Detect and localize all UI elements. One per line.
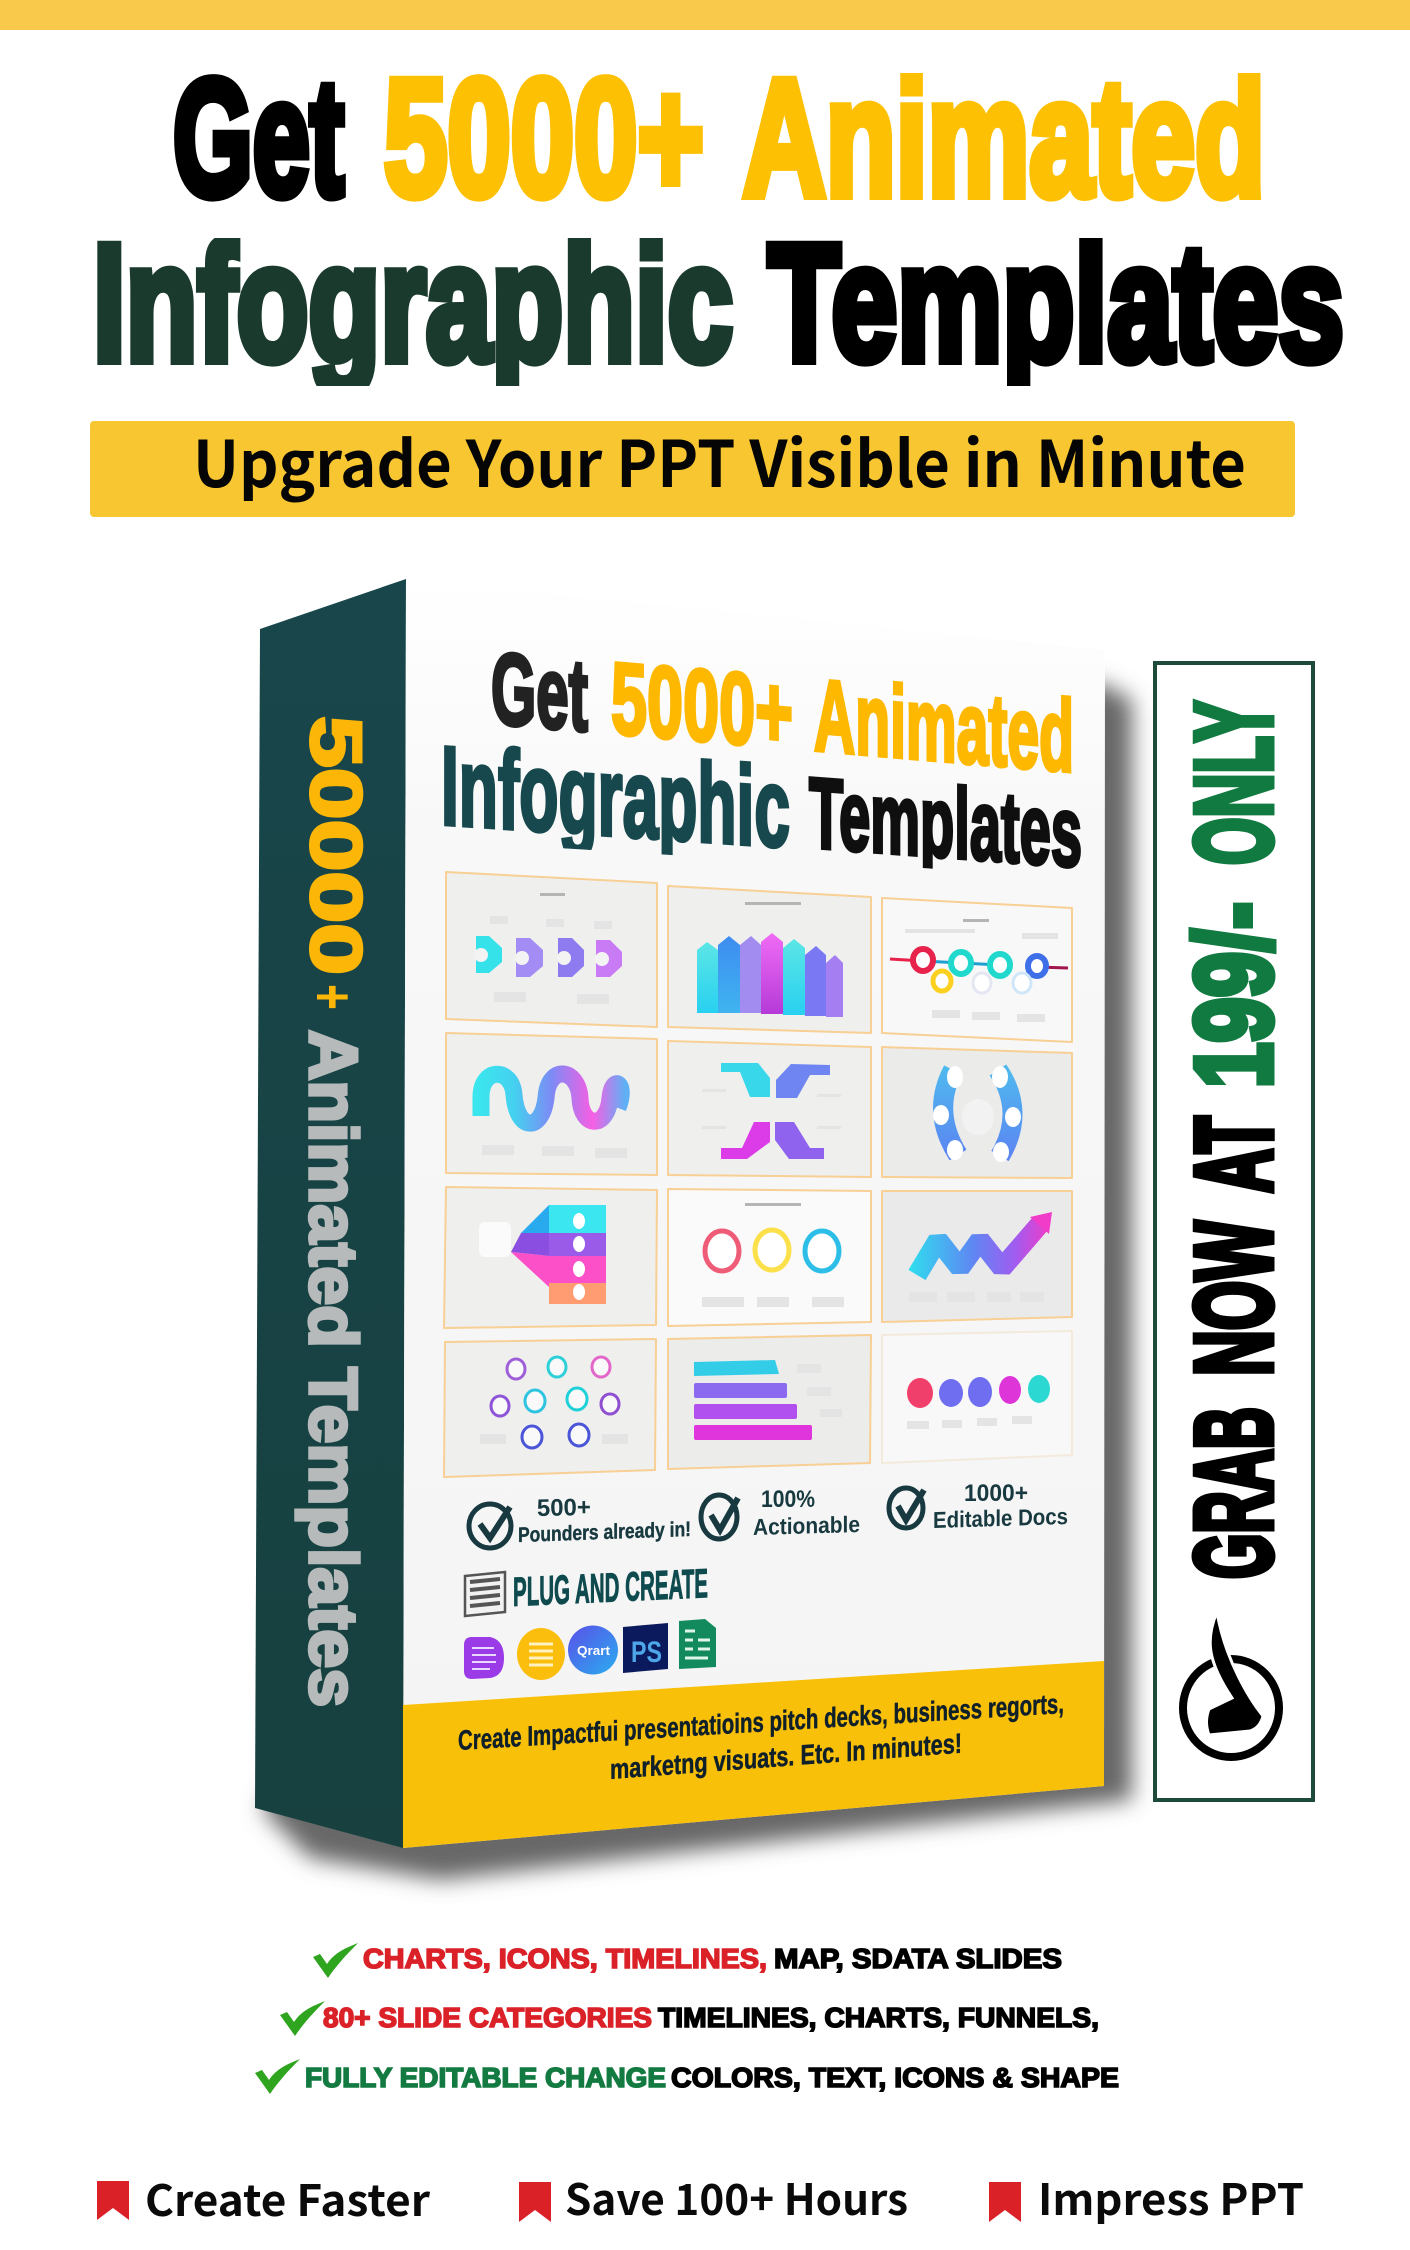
feature: categories <box>280 2001 1099 2036</box>
icon row: apps <box>464 1619 716 1680</box>
box yellow band <box>403 1661 1104 1848</box>
box title <box>444 652 1081 869</box>
stat: 500+ founders: Pounders already in! <box>518 1518 691 1547</box>
icon: photoshop <box>623 1623 668 1673</box>
box title: Templates <box>809 757 1082 889</box>
icon: yellow circle <box>517 1628 565 1680</box>
side label: + <box>299 984 366 1010</box>
card 7: funnel <box>444 1187 657 1328</box>
feature: categories: 80+ SLIDE CATEGORIES <box>323 2002 652 2033</box>
card 1: chevron diagram <box>446 872 657 1027</box>
icon: photoshop: PS <box>631 1636 662 1669</box>
stat: 500+ founders <box>469 1494 691 1548</box>
icon: blue circle <box>568 1626 618 1674</box>
price text: 199/- <box>1173 902 1295 1088</box>
side label: 50000 <box>295 716 375 975</box>
side label <box>295 716 375 1707</box>
price text: AT <box>1173 1116 1295 1193</box>
price text <box>1173 701 1295 1579</box>
product box <box>255 579 1132 1880</box>
box title: Infographic <box>441 723 790 871</box>
card 4: wave <box>446 1033 657 1175</box>
icon: green sheet <box>679 1619 716 1669</box>
feature: charts <box>313 1943 1062 1978</box>
card 2: pillar arrows <box>668 886 871 1033</box>
stat: 1000+ editable docs <box>889 1480 1068 1533</box>
card 5: cross arrows <box>668 1041 871 1177</box>
price text: GRAB <box>1173 1407 1295 1579</box>
box title: Get <box>491 631 588 753</box>
card 8: three rings <box>668 1189 871 1326</box>
feature: editable: COLORS, TEXT, ICONS & SHAPE <box>671 2062 1119 2093</box>
title line 2: Infographic <box>93 211 733 396</box>
feature: editable <box>255 2059 1119 2094</box>
top band <box>0 0 1410 30</box>
title line 2 <box>97 238 1343 386</box>
icon: blue circle: Qrart <box>577 1643 611 1658</box>
card 6: ring cycle <box>882 1047 1072 1178</box>
stat: 1000+ editable docs: Editable Docs <box>933 1503 1068 1533</box>
box title: Animated <box>814 658 1074 794</box>
icon: check logo <box>1183 1612 1279 1757</box>
price text: NOW <box>1173 1221 1295 1376</box>
stat: 500+ founders: 500+ <box>537 1494 591 1522</box>
box title: 5000+ <box>611 641 793 770</box>
stat: 100% actionable: Actionable <box>753 1511 860 1540</box>
card 11: horizontal bars <box>668 1335 871 1469</box>
card 3: timeline <box>882 898 1072 1042</box>
benefit: create faster: Create Faster <box>145 2167 430 2229</box>
feature: charts: MAP, SDATA SLIDES <box>774 1943 1062 1974</box>
title line 1: Get <box>173 46 344 231</box>
feature list <box>255 1943 1119 2094</box>
title <box>97 73 1343 386</box>
box yellow band: Create Impactfui presentatioins pitch decks, business regorts, <box>458 1688 1064 1756</box>
stat: 100% actionable: 100% <box>761 1486 815 1513</box>
title line 1: 5000+ <box>384 46 704 231</box>
feature: categories: TIMELINES, CHARTS, FUNNELS, <box>658 2002 1099 2033</box>
card 12: dots <box>882 1331 1072 1463</box>
benefit: impress ppt: Impress PPT <box>1038 2166 1304 2228</box>
benefits row <box>97 2166 1304 2229</box>
box shadow <box>262 680 1132 1880</box>
feature: editable: FULLY EDITABLE CHANGE <box>305 2062 666 2093</box>
subtitle banner: Upgrade Your PPT Visible in Minute <box>193 414 1246 506</box>
price text: ONLY <box>1173 701 1295 865</box>
box side face <box>255 579 406 1848</box>
card 10: ring cluster <box>444 1339 656 1477</box>
icon: plug and create document <box>465 1572 505 1616</box>
stat: 100% actionable <box>701 1486 860 1540</box>
stat: 1000+ editable docs: 1000+ <box>964 1480 1028 1507</box>
box front face <box>403 579 1105 1848</box>
card 9: zigzag arrow <box>882 1191 1072 1322</box>
price panel <box>1155 663 1313 1800</box>
plug and create label: PLUG AND CREATE <box>513 1560 708 1615</box>
box yellow band: marketng visuats. Etc. In minutes! <box>610 1728 962 1785</box>
title line 1 <box>174 73 1262 202</box>
feature: charts: CHARTS, ICONS, TIMELINES, <box>363 1943 767 1974</box>
icon: purple doc <box>464 1637 504 1679</box>
side label: Animated Templates <box>295 1030 371 1707</box>
benefit: save hours: Save 100+ Hours <box>565 2166 908 2228</box>
